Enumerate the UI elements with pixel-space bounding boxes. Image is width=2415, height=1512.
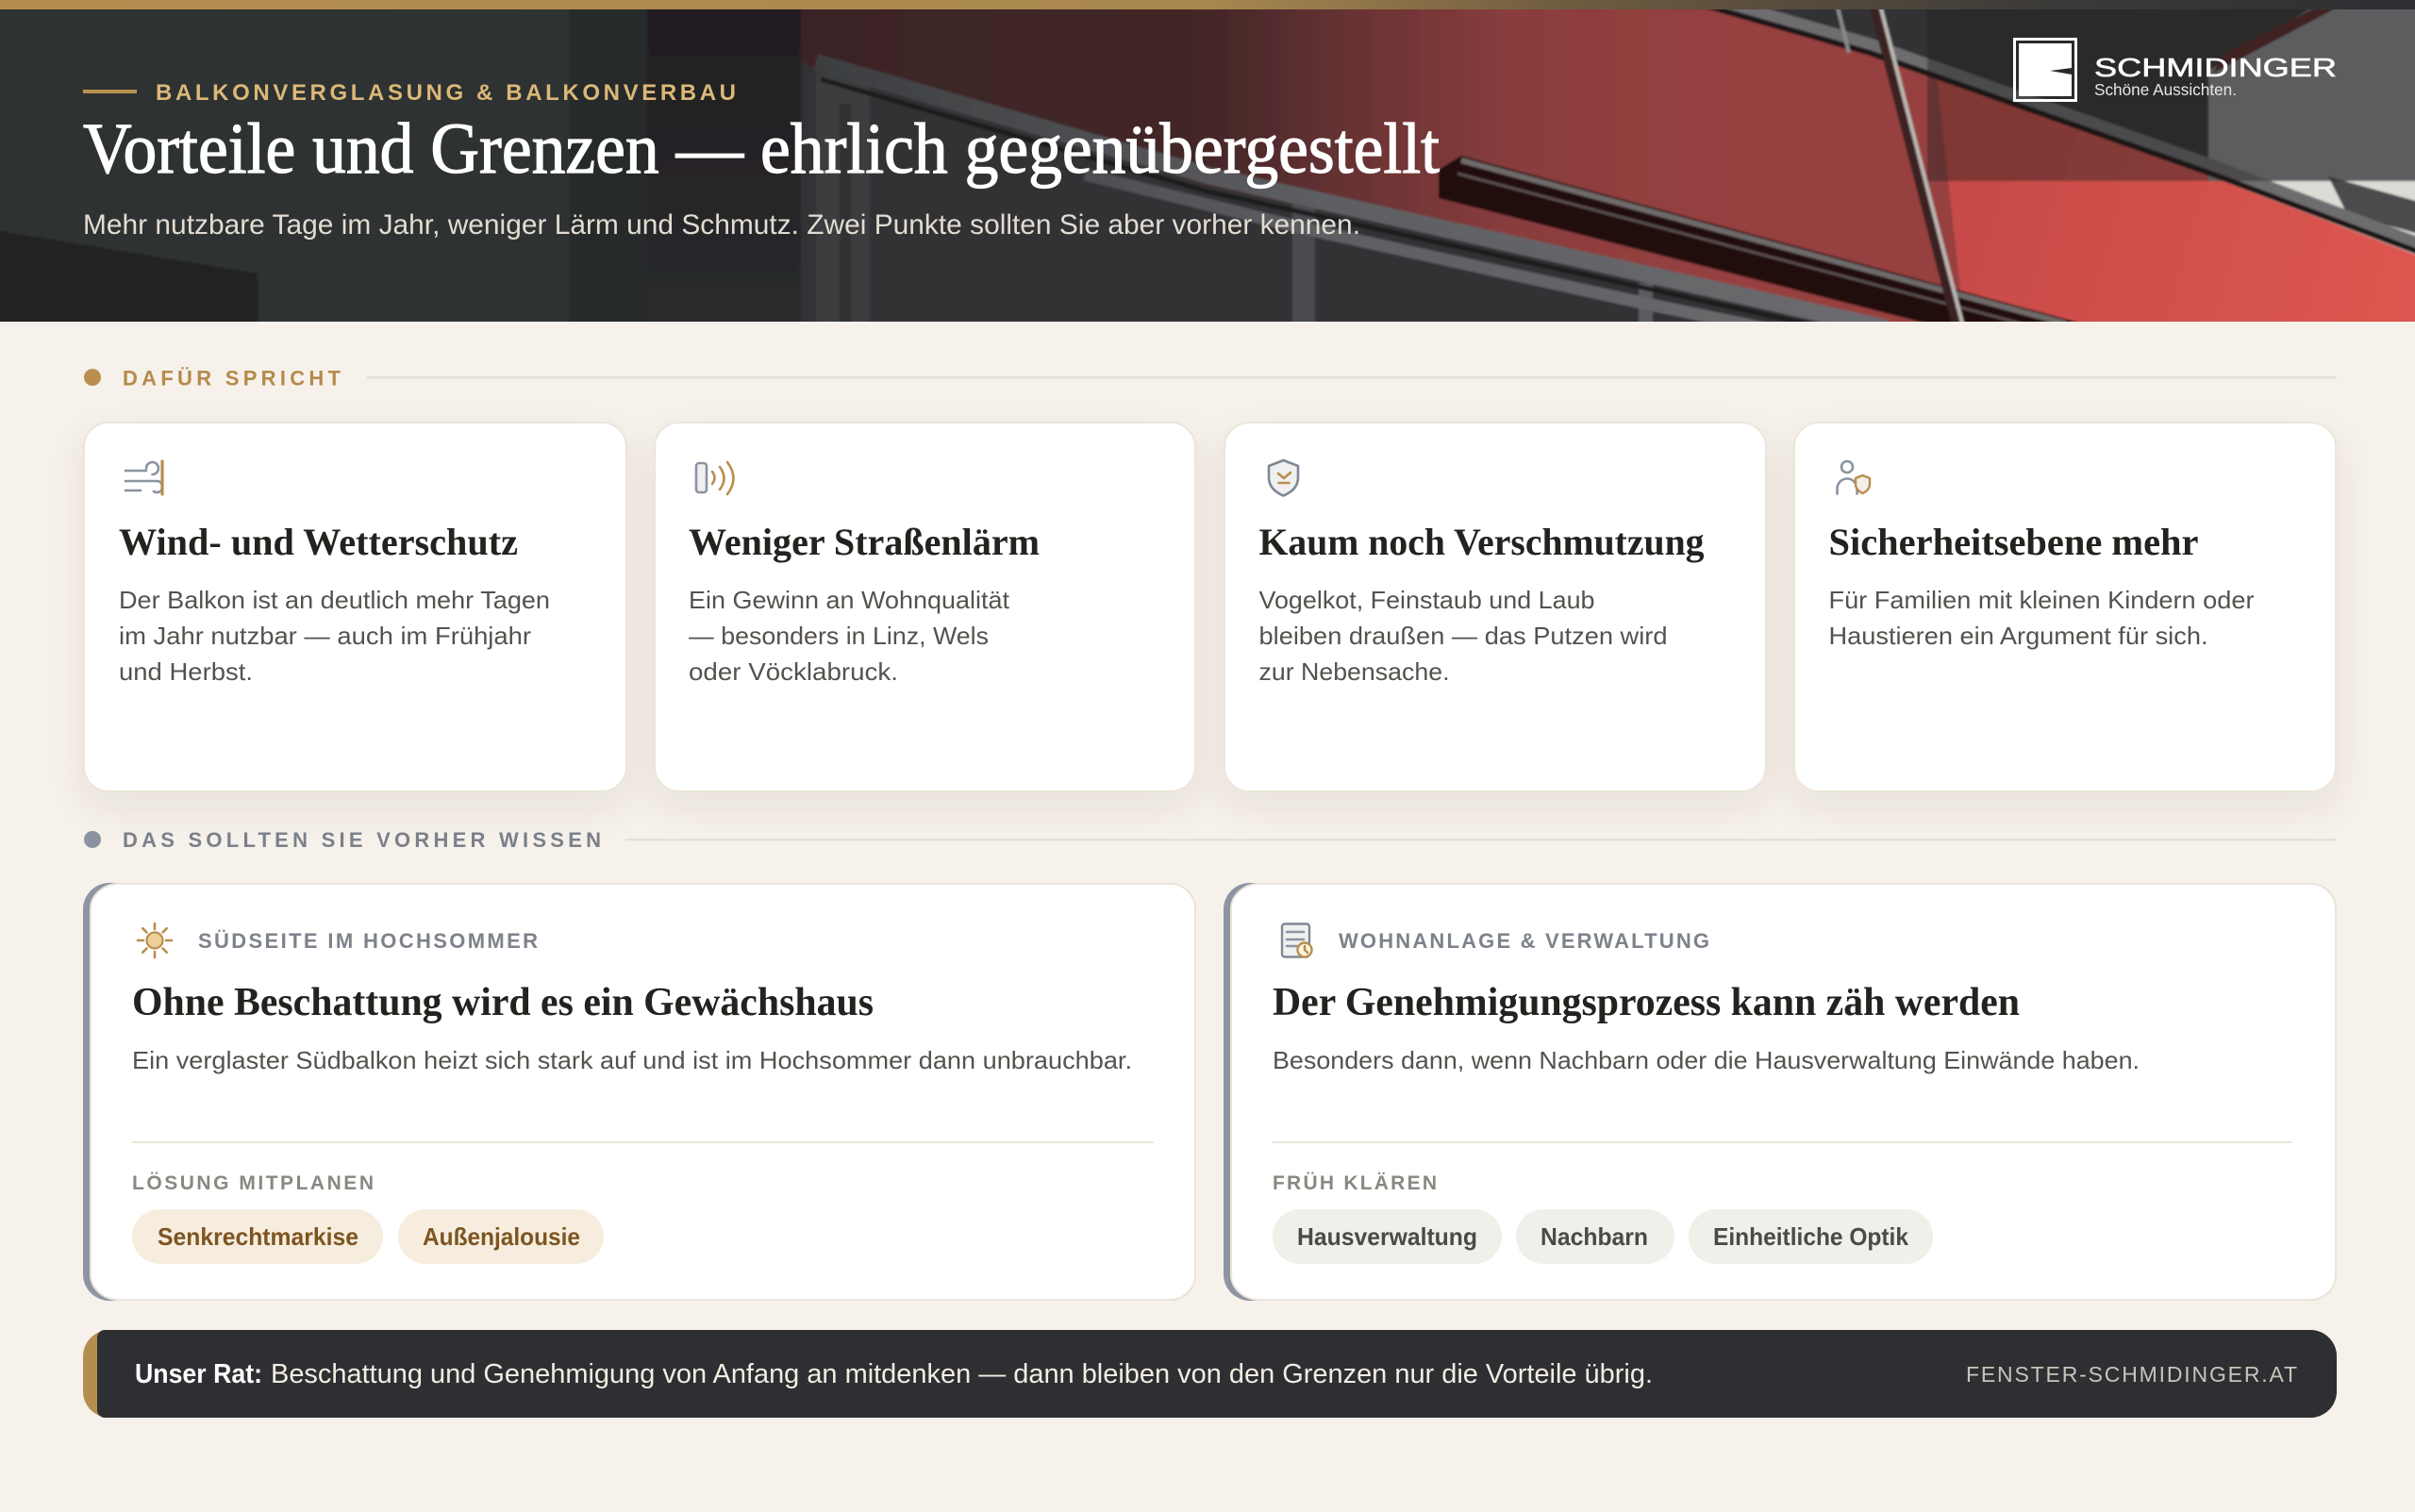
chip: Nachbarn bbox=[1516, 1209, 1674, 1264]
section heading: Dafür spricht: DAFÜR SPRICHT bbox=[123, 366, 341, 390]
header band bbox=[0, 0, 2415, 349]
card heading: Weniger Straßenlärm bbox=[689, 521, 1040, 563]
card text: und Herbst. bbox=[119, 657, 253, 686]
advice bar: Beschattung und Genehmigung von Anfang an mitdenken — dann bleiben von den Grenzen nur die Vorteile übrig. bbox=[271, 1359, 1653, 1389]
advice text: Unser Rat: bbox=[135, 1359, 262, 1389]
chip: Hausverwaltung bbox=[1273, 1209, 1502, 1264]
icon: shield bbox=[1269, 460, 1298, 496]
card text: Vogelkot, Feinstaub und Laub bbox=[1258, 586, 1594, 614]
logo: Schmidinger: SCHMIDINGER bbox=[2094, 53, 2337, 82]
section heading: Dafür spricht bbox=[84, 366, 2337, 390]
card text: Für Familien mit kleinen Kindern oder bbox=[1828, 586, 2255, 614]
card text bbox=[119, 586, 550, 686]
logo: Schmidinger: Schöne Aussichten. bbox=[2094, 80, 2237, 99]
icon: sound waves bbox=[696, 462, 734, 494]
clarify label: FRÜH KLÄREN bbox=[1273, 1172, 1437, 1194]
header photo: balcony facade bbox=[0, 9, 2415, 322]
subtitle: Mehr nutzbare Tage im Jahr, weniger Lärm und Schmutz. Zwei Punkte sollten Sie aber vorher kennen. bbox=[83, 209, 1360, 241]
solution label: LÖSUNG MITPLANEN bbox=[132, 1172, 374, 1194]
card text: im Jahr nutzbar — auch im Frühjahr bbox=[119, 622, 531, 650]
panel: Wind- und Wetterschutz bbox=[84, 423, 626, 791]
title: Vorteile und Grenzen — ehrlich gegenübergestellt bbox=[83, 109, 1440, 189]
chip: Einheitliche Optik bbox=[1689, 1209, 1933, 1264]
card text: Ein Gewinn an Wohnqualität bbox=[689, 586, 1010, 614]
advice bar bbox=[83, 1330, 2337, 1418]
card text: Besonders dann, wenn Nachbarn oder die Hausverwaltung Einwände haben. bbox=[1273, 1046, 2140, 1074]
eyebrow rule bbox=[83, 90, 137, 93]
section heading: Das sollten Sie vorher wissen bbox=[84, 828, 2337, 852]
chip: Einheitliche Optik: Einheitliche Optik bbox=[1713, 1222, 1909, 1251]
chip: Hausverwaltung: Hausverwaltung bbox=[1297, 1222, 1477, 1251]
card text: — besonders in Linz, Wels bbox=[689, 622, 989, 650]
card text bbox=[1258, 586, 1668, 686]
card heading: Kaum noch Verschmutzung bbox=[1258, 521, 1704, 563]
card heading: Sicherheitsebene mehr bbox=[1828, 521, 2198, 563]
icon: document with clock bbox=[1282, 924, 1311, 956]
section heading: Das sollten Sie vorher wissen: DAS SOLLTEN SIE VORHER WISSEN bbox=[123, 828, 601, 852]
card text: zur Nebensache. bbox=[1258, 657, 1449, 686]
eyebrow: SÜDSEITE IM HOCHSOMMER bbox=[198, 929, 538, 953]
card heading: Ohne Beschattung wird es ein Gewächshaus bbox=[132, 981, 874, 1024]
chip: Außenjalousie: Außenjalousie bbox=[423, 1222, 580, 1251]
icon: sun bbox=[138, 923, 172, 957]
card text: Der Balkon ist an deutlich mehr Tagen bbox=[119, 586, 550, 614]
icon: wind bbox=[125, 461, 162, 494]
icon: person with shield bbox=[1838, 461, 1870, 494]
top accent bar bbox=[0, 0, 2415, 9]
website: FENSTER-SCHMIDINGER.AT bbox=[1966, 1362, 2297, 1387]
chip: Außenjalousie bbox=[398, 1209, 604, 1264]
chip: Senkrechtmarkise: Senkrechtmarkise bbox=[158, 1222, 358, 1251]
card text: Ein verglaster Südbalkon heizt sich stark auf und ist im Hochsommer dann unbrauchbar. bbox=[132, 1046, 1132, 1074]
card text bbox=[1828, 586, 2255, 650]
card text bbox=[689, 586, 1010, 686]
panel: Wohnanlage & Verwaltung bbox=[1224, 883, 2337, 1301]
eyebrow: WOHNANLAGE & VERWALTUNG bbox=[1339, 929, 1709, 953]
card text: oder Vöcklabruck. bbox=[689, 657, 898, 686]
card heading: Wind- und Wetterschutz bbox=[119, 521, 518, 563]
card text: bleiben draußen — das Putzen wird bbox=[1258, 622, 1668, 650]
panel: Südseite im Hochsommer bbox=[83, 883, 1196, 1301]
panel: Kaum noch Verschmutzung bbox=[1224, 423, 1766, 791]
panel: Sicherheitsebene mehr bbox=[1794, 423, 2336, 791]
eyebrow: BALKONVERGLASUNG & BALKONVERBAU bbox=[156, 80, 736, 106]
logo: Schmidinger bbox=[2015, 40, 2337, 100]
panel: Weniger Straßenlärm bbox=[655, 423, 1195, 791]
chip: Nachbarn: Nachbarn bbox=[1541, 1222, 1648, 1251]
card heading: Der Genehmigungsprozess kann zäh werden bbox=[1273, 981, 2020, 1024]
card text: Haustieren ein Argument für sich. bbox=[1828, 622, 2207, 650]
chip: Senkrechtmarkise bbox=[132, 1209, 383, 1264]
